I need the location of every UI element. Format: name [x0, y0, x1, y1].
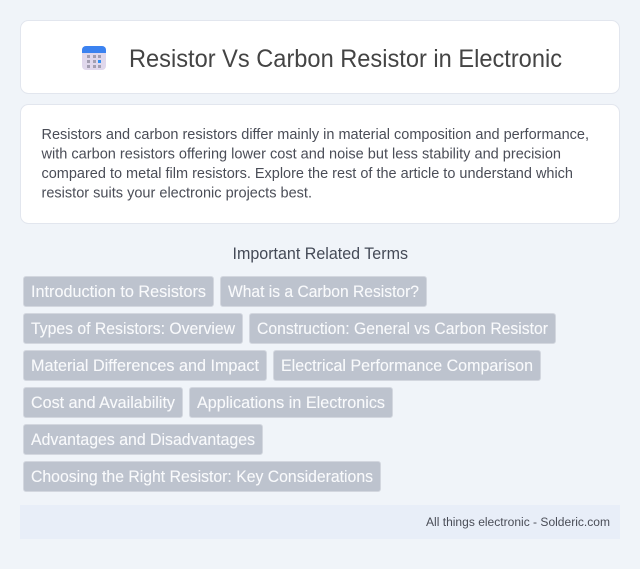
tag: construction	[250, 314, 556, 344]
heading: related terms: Important Related Terms	[232, 245, 408, 263]
tag: carbon resistor: What is a Carbon Resistor?	[228, 282, 419, 301]
tag list	[24, 276, 556, 492]
text block: description: resistor suits your electronic projects best.	[42, 186, 312, 202]
tag: introduction: Introduction to Resistors	[31, 282, 206, 301]
tag: advantages: Advantages and Disadvantages	[31, 430, 255, 449]
tag: types: Types of Resistors: Overview	[31, 319, 236, 338]
tag: material: Material Differences and Impact	[31, 356, 259, 375]
tag: material	[24, 350, 266, 380]
tag: types	[24, 314, 242, 344]
tag: construction: Construction: General vs Carbon Resistor	[257, 319, 548, 338]
tag: introduction	[24, 276, 214, 306]
panel: description card	[20, 104, 620, 224]
title: Resistor Vs Carbon Resistor in Electronic	[129, 45, 562, 73]
tag: applications: Applications in Electronics	[197, 393, 385, 412]
panel: title card	[20, 20, 620, 94]
tag: carbon resistor	[220, 276, 426, 306]
tag: applications	[190, 388, 392, 418]
tag: cost: Cost and Availability	[31, 393, 176, 412]
text block: description	[41, 127, 589, 202]
tag: electrical: Electrical Performance Comparison	[281, 356, 533, 375]
tag: choosing: Choosing the Right Resistor: Key Considerations	[31, 467, 373, 486]
icon: calendar	[82, 46, 106, 70]
tag: advantages	[24, 424, 262, 454]
text block: description: with carbon resistors offering lower cost and noise but less stability and precision	[41, 146, 561, 162]
footer	[20, 505, 620, 539]
tag: choosing	[24, 462, 380, 492]
text block: description: Resistors and carbon resistors differ mainly in material composition and performance,	[42, 127, 589, 143]
text block: description: compared to metal film resistors. Explore the rest of the article to understand which	[42, 166, 573, 182]
footer: All things electronic - Solderic.com	[426, 515, 610, 529]
tag: electrical	[274, 350, 540, 380]
tag: cost	[24, 388, 182, 418]
